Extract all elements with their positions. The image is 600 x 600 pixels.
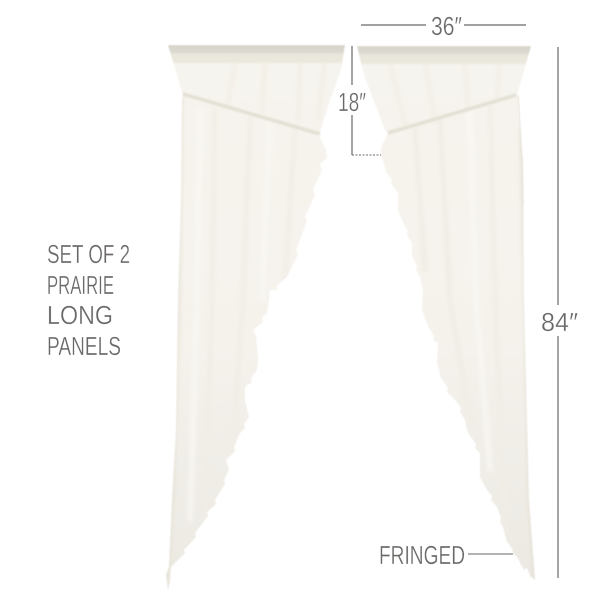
left curtain header band xyxy=(160,45,350,63)
right curtain tie-back xyxy=(388,95,516,133)
left curtain panel xyxy=(160,45,350,600)
right curtain panel xyxy=(350,46,540,590)
tie height dimension: 18 inches: 18″ xyxy=(338,87,366,117)
tie height dimension: 18 inches xyxy=(338,46,381,155)
left curtain tie-back xyxy=(183,94,320,134)
fringed callout: FRINGED xyxy=(379,540,465,570)
panel description label: LONG xyxy=(47,300,113,330)
right curtain side tie tail xyxy=(518,95,523,205)
panel description label: PANELS xyxy=(47,331,121,361)
length dimension: 84 inches: 84″ xyxy=(541,307,578,337)
panel description label: PRAIRIE xyxy=(47,270,114,300)
width dimension: 36 inches: 36″ xyxy=(431,11,462,41)
right curtain header band xyxy=(350,46,540,64)
panel description label: SET OF 2 xyxy=(47,239,130,269)
panel description label xyxy=(47,239,130,361)
left curtain folds xyxy=(167,98,192,580)
right curtain folds xyxy=(520,146,532,558)
